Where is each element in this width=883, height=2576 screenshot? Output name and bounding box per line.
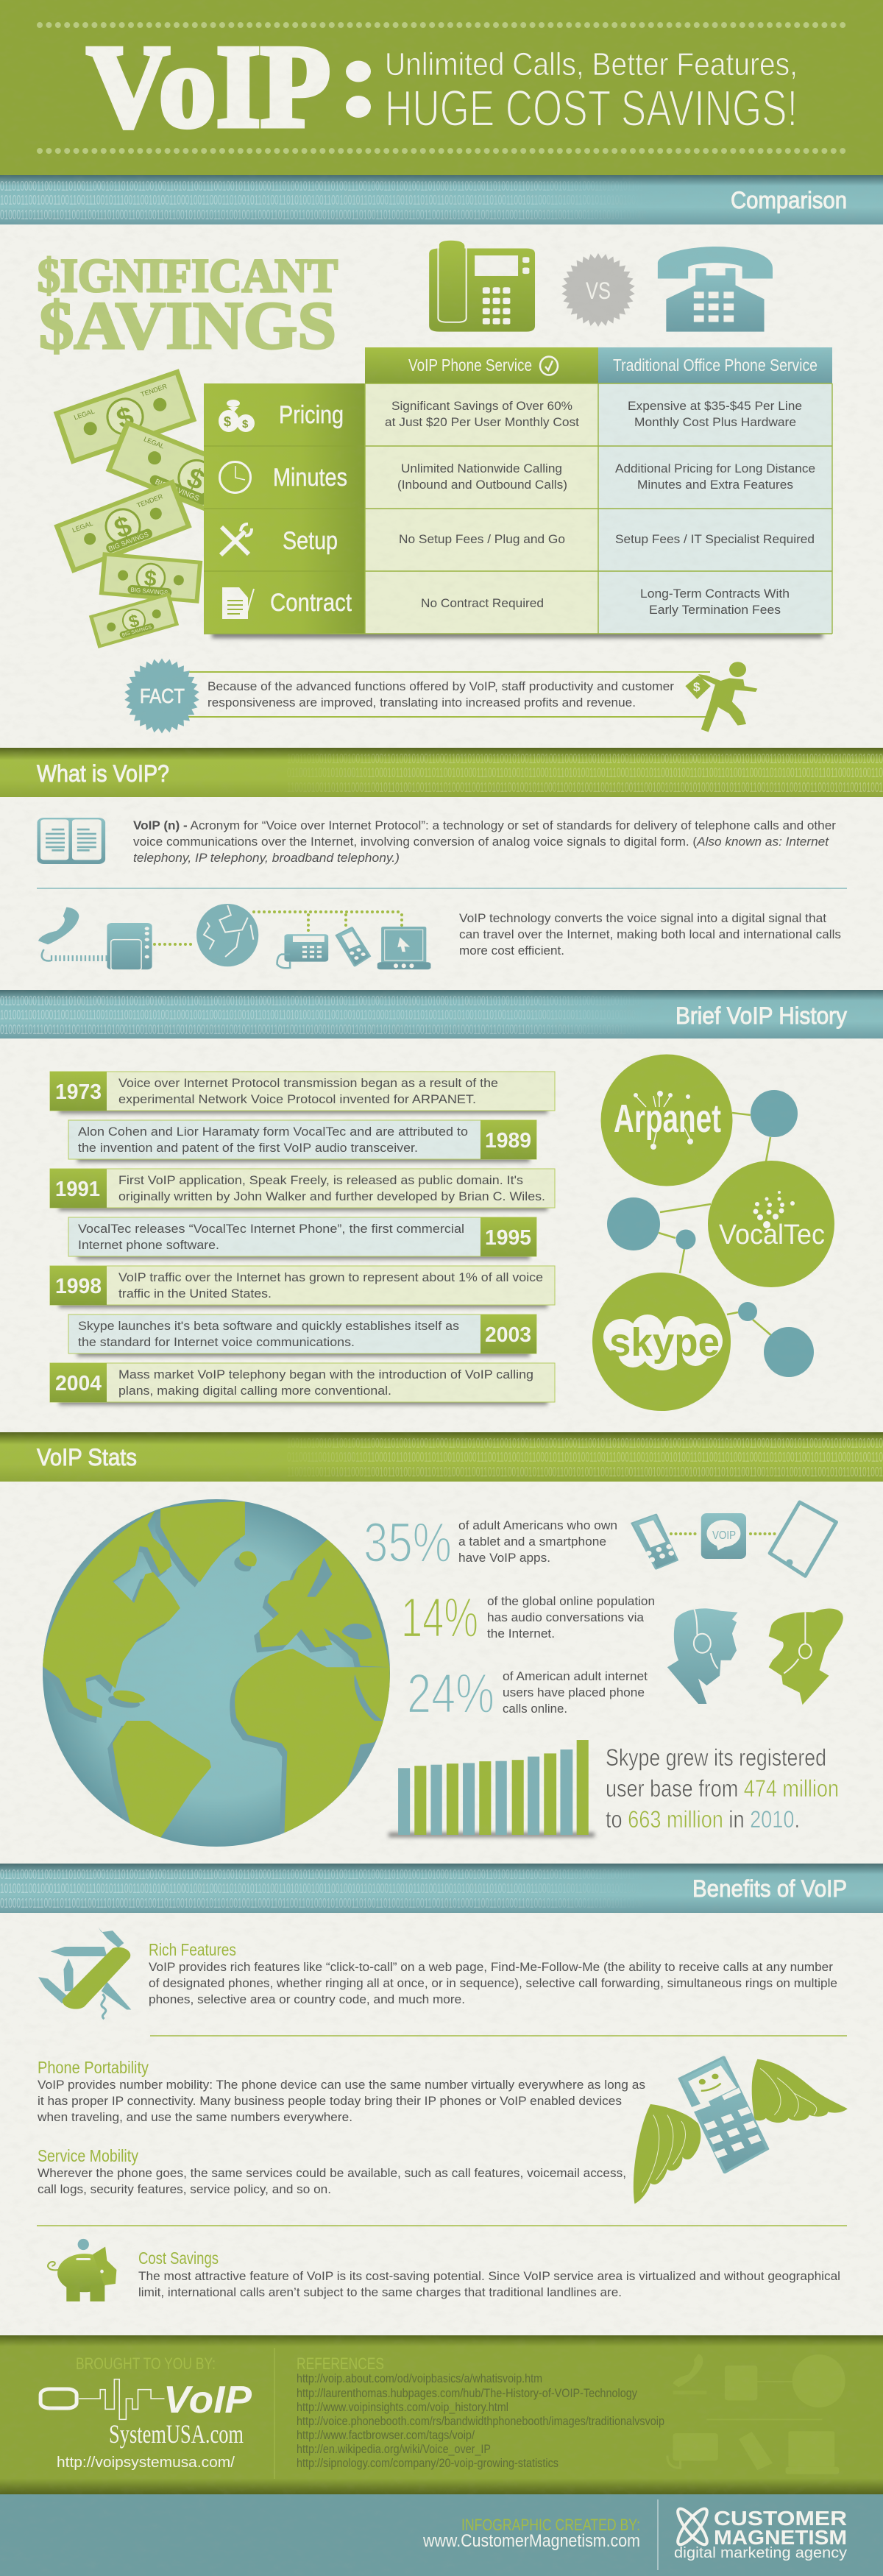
section band: Benefits of VoIP: Benefits of VoIP: [692, 1875, 847, 1902]
VoIP column cells: Unlimited Nationwide Calling: [401, 461, 562, 475]
bubble: VocalTec: VocalTec: [719, 1220, 825, 1250]
icon: laptop: [377, 927, 430, 969]
VoIP column cells: Significant Savings of Over 60%: [391, 399, 572, 413]
section band: What is VoIP?: [0, 748, 883, 797]
header: Traditional Office Phone Service: [598, 347, 832, 383]
VoIP definition text: [133, 818, 836, 865]
illustration: globe: [38, 1499, 390, 1847]
footer: green panel: [0, 2335, 883, 2494]
bubble: Arpanet: [600, 1054, 733, 1186]
VoIP technology text: VoIP technology converts the voice signal into a digital signal that: [459, 911, 826, 925]
Customer Magnetism logo: [673, 2505, 847, 2561]
references: http://www.voipinsights.com/voip_history.html: [297, 2400, 508, 2414]
traditional column cells: Additional Pricing for Long Distance: [615, 461, 815, 475]
2003: [68, 1314, 536, 1356]
benefit: Phone Portability: VoIP provides number mobility: The phone device can use the same number virtually everywhere as long as: [38, 2078, 645, 2092]
benefit: Rich Features: phones, selective area or country code, and much more.: [149, 1992, 465, 2006]
man with headset: [667, 1608, 738, 1704]
stat: Skype growth text: to 663 million in 2010.: [606, 1806, 800, 1833]
label: Setup: Setup: [283, 527, 338, 555]
VoIP column cells: No Contract Required: [421, 596, 544, 610]
stat: Skype growth text: [606, 1744, 839, 1833]
icons: phone, VoIP bubble, tablet: [632, 1502, 836, 1576]
label: Minutes: Minutes: [273, 464, 347, 492]
benefit: Cost Savings: [138, 2248, 840, 2299]
bubble: Skype: skype: [609, 1320, 720, 1365]
references: http://en.wikipedia.org/wiki/Voice_over_IP: [297, 2442, 491, 2456]
2004: Mass market VoIP telephony began with the introduction of VoIP calling: [118, 1367, 533, 1381]
section band: Brief VoIP History: Brief VoIP History: [675, 1002, 847, 1029]
stat: 14%: of the global online population: [487, 1594, 655, 1608]
stat: 35%: have VoIP apps.: [458, 1551, 550, 1565]
icon: running man with briefcase: $: [693, 680, 701, 694]
traditional column cells: Setup Fees / IT Specialist Required: [615, 532, 815, 546]
label: Contract: Contract: [270, 589, 352, 617]
icon: open book: [38, 818, 105, 864]
stat: 24%: of American adult internet: [503, 1669, 648, 1683]
traditional column cells: [598, 383, 832, 634]
1998: 1998: [55, 1275, 102, 1298]
icon: money bags: $: [224, 414, 231, 429]
fact text: [208, 679, 674, 710]
1973: experimental Network Voice Protocol invented for ARPANET.: [118, 1092, 476, 1106]
benefit: Cost Savings: Cost Savings: [138, 2248, 219, 2268]
traditional column cells: Monthly Cost Plus Hardware: [634, 415, 796, 429]
Customer Magnetism logo: digital marketing agency: [674, 2545, 847, 2561]
section band: What is VoIP?: What is VoIP?: [37, 760, 169, 787]
icon: traditional phone: [658, 247, 773, 332]
benefit: Rich Features: [149, 1940, 837, 2006]
section band: Comparison: [0, 175, 883, 224]
2003: the standard for Internet voice communications.: [78, 1335, 355, 1349]
bill 1: $: [113, 401, 138, 435]
bill 1: TENDER: [140, 382, 169, 398]
VoIP column cells: No Setup Fees / Plug and Go: [399, 532, 565, 546]
stat: 35%: 35%: [364, 1512, 452, 1574]
references: http://www.factbrowser.com/tags/voip/: [297, 2428, 475, 2442]
header: Traditional Office Phone Service: Traditional Office Phone Service: [613, 355, 818, 375]
bill 2: $: [182, 462, 208, 497]
footer: teal panel: [0, 2494, 883, 2576]
icon: handset: [38, 907, 107, 960]
2004: 2004: [55, 1372, 102, 1395]
infographic credit: [422, 2516, 640, 2551]
sponsor logo: VoIP: [163, 2379, 252, 2421]
sponsor logo: [40, 2379, 252, 2449]
title colon: [346, 60, 371, 118]
bubble: Skype: [592, 1273, 731, 1411]
1973: Voice over Internet Protocol transmission began as a result of the: [118, 1076, 498, 1090]
bill 2: LEGAL: [143, 435, 166, 450]
1989: [68, 1120, 536, 1162]
woman with headset: [769, 1608, 843, 1705]
icon: money bags: [219, 400, 255, 432]
header: VoIP Phone Service: VoIP Phone Service: [408, 355, 532, 375]
icon: clock: [219, 462, 250, 493]
stat: 14%: 14%: [401, 1587, 478, 1649]
heading: Significant Savings: $AVINGS: [39, 288, 336, 363]
1998: [50, 1266, 555, 1308]
stat: 24%: calls online.: [503, 1702, 567, 1716]
stat: Skype growth text: Skype grew its registered: [606, 1744, 826, 1771]
brought to you by: BROUGHT TO YOU BY:: [76, 2354, 216, 2373]
bill 5: BIG SAVINGS: [121, 625, 153, 638]
stat: 35%: of adult Americans who own: [458, 1518, 617, 1532]
1973: 1973: [55, 1080, 102, 1104]
1995: [68, 1217, 536, 1259]
infographic credit: INFOGRAPHIC CREATED BY:: [461, 2516, 640, 2534]
icon: mobile phone: [336, 927, 370, 966]
1995: VocalTec releases “VocalTec Internet Phone”, the first commercial: [78, 1222, 464, 1236]
Customer Magnetism logo: CUSTOMER: [714, 2507, 847, 2530]
stat: 35%: a tablet and a smartphone: [458, 1535, 606, 1549]
sponsor url: http://voipsystemusa.com/: [57, 2455, 235, 2471]
VoIP column cells: [365, 383, 598, 634]
1973: [50, 1072, 555, 1114]
1991: [50, 1169, 555, 1211]
section band: Brief VoIP History: [0, 990, 883, 1038]
heading: Significant Savings: [38, 250, 338, 363]
benefit: Service Mobility: Wherever the phone goes, the same services could be available, such as call features, voicemail access,: [38, 2166, 626, 2180]
comparison table: [204, 347, 832, 638]
bill 3: $: [110, 511, 136, 545]
icon: contract document: [222, 587, 254, 619]
1998: VoIP traffic over the Internet has grown to represent about 1% of all voice: [118, 1270, 543, 1284]
1989: Alon Cohen and Lior Haramaty form VocalTec and are attributed to: [78, 1125, 468, 1139]
benefit: Phone Portability: it has proper IP connectivity. Many business people today bring their IP phones or VoIP enabled devices: [38, 2094, 622, 2108]
traditional column cells: Expensive at $35-$45 Per Line: [628, 399, 802, 413]
bill 1: LEGAL: [73, 407, 96, 421]
stat: Skype growth text: user base from 474 million: [606, 1775, 839, 1802]
header banner: [0, 0, 883, 175]
icon: VoIP adapter: [107, 923, 152, 970]
bar chart: Skype user growth: [389, 1740, 595, 1837]
traditional column cells: Minutes and Extra Features: [637, 478, 793, 492]
stat: 35%: [364, 1512, 617, 1574]
icons: headset agents: [667, 1608, 843, 1705]
benefit: Phone Portability: when traveling, and use the same numbers everywhere.: [37, 2110, 352, 2124]
references: [297, 2354, 664, 2470]
references: http://laurenthomas.hubpages.com/hub/The-History-of-VOIP-Technology: [297, 2386, 637, 2400]
fact text: responsiveness are improved, translating into increased profits and revenue.: [208, 696, 636, 710]
benefit: Phone Portability: [37, 2058, 645, 2124]
1995: Internet phone software.: [78, 1238, 219, 1252]
bill 4: $: [143, 566, 157, 592]
bubble: Arpanet: Arpanet: [614, 1097, 721, 1141]
bill 5: [89, 592, 179, 648]
badge: VS: VS: [586, 277, 611, 304]
benefit: Rich Features: VoIP provides rich features like “click-to-call” on a web page, Find-Me-Follow-Me (the ability to receive calls at any number: [149, 1960, 833, 1974]
faded network diagram: [667, 2354, 845, 2474]
row labels column: [204, 383, 365, 634]
VoIP technology text: more cost efficient.: [459, 944, 564, 958]
bill 5: $: [127, 611, 142, 632]
bubble: VocalTec: [708, 1161, 834, 1287]
icon: globe: [196, 904, 258, 966]
bill 3: LEGAL: [71, 520, 93, 534]
infographic credit: www.CustomerMagnetism.com: [422, 2531, 640, 2551]
title: VoIP: VoIP: [87, 21, 330, 152]
icon: swiss army knife: [38, 1928, 131, 2019]
benefit: Phone Portability: Phone Portability: [38, 2058, 149, 2077]
subtitle line 1: Unlimited Calls, Better Features,: [385, 46, 798, 82]
icon: money bags: $: [242, 418, 249, 431]
section band: Benefits of VoIP: [0, 1864, 883, 1913]
traditional column cells: Long-Term Contracts With: [640, 587, 790, 601]
1995: 1995: [485, 1226, 531, 1250]
bill 3: [54, 479, 192, 573]
references: REFERENCES: [297, 2354, 384, 2373]
1991: 1991: [55, 1178, 100, 1201]
traditional column cells: Early Termination Fees: [649, 603, 781, 617]
bill 2: [106, 420, 249, 520]
benefit: Cost Savings: The most attractive feature of VoIP is its cost-saving potential. Since VoIP service area is virtualized and without geographical: [138, 2269, 840, 2283]
badge: VS: [561, 253, 635, 327]
stat: 24%: 24%: [407, 1663, 494, 1725]
benefit: Rich Features: Rich Features: [149, 1940, 236, 1959]
label: Pricing: Pricing: [279, 401, 344, 429]
dotted connection lines: [155, 912, 403, 944]
2003: Skype launches it's beta software and quickly establishes itself as: [78, 1319, 459, 1333]
bill 2: BIG SAVINGS: [154, 478, 200, 503]
icons: phone, VoIP bubble, tablet: VOIP: [712, 1529, 736, 1542]
icon: piggy bank: [48, 2239, 116, 2301]
VoIP technology text: can travel over the Internet, making both local and international calls: [459, 927, 841, 941]
fact badge: [124, 658, 199, 734]
icon: VoIP desk phone: [429, 241, 535, 332]
benefit: Service Mobility: Service Mobility: [38, 2146, 138, 2165]
2004: plans, making digital calling more conventional.: [118, 1384, 391, 1398]
section band: VoIP Stats: [0, 1432, 883, 1482]
section band: Comparison: Comparison: [731, 187, 847, 213]
benefit: Rich Features: of designated phones, whether ringing all at once, or in sequence), selective call forwarding, simultaneous rings on multiple: [149, 1976, 837, 1990]
stat: 24%: [407, 1663, 648, 1725]
stat: 24%: users have placed phone: [503, 1685, 645, 1699]
stat: 14%: [401, 1587, 655, 1649]
bill 4: [99, 552, 202, 604]
bill 4: BIG SAVINGS: [130, 587, 169, 596]
VoIP column cells: (Inbound and Outbound Calls): [397, 478, 567, 492]
icon: winged phone: [634, 2057, 848, 2204]
icon: tools: [221, 524, 252, 555]
VoIP column cells: at Just $20 Per User Monthly Cost: [385, 415, 579, 429]
references: http://voip.about.com/od/voipbasics/a/whatisvoip.htm: [297, 2371, 542, 2385]
illustration: dollar bills: [54, 369, 249, 648]
icon: running man with briefcase: [685, 662, 757, 732]
2004: [50, 1363, 555, 1405]
benefit: Cost Savings: limit, international calls aren’t subject to the same charges that traditional landlines are.: [138, 2285, 622, 2299]
header: VoIP Phone Service: [365, 347, 598, 383]
bubble network: Arpanet, VocalTec, Skype: [592, 1054, 834, 1411]
1989: the invention and patent of the first VoIP audio transceiver.: [78, 1141, 418, 1155]
bill 3: TENDER: [136, 492, 164, 509]
stat: 14%: has audio conversations via: [487, 1610, 645, 1624]
1991: originally written by John Walker and further developed by Brian C. Wiles.: [118, 1189, 545, 1203]
1989: 1989: [485, 1129, 531, 1153]
VoIP definition text: telephony, IP telephony, broadband telephony.): [133, 851, 400, 865]
callout: fact: [124, 658, 757, 734]
timeline: VoIP history: [50, 1072, 555, 1405]
1998: traffic in the United States.: [118, 1287, 272, 1301]
VoIP definition text: voice communications over the Internet, involving conversion of analog voice signals to digital form. ( Also known as: Internet: [133, 835, 829, 849]
stat: 14%: the Internet.: [487, 1627, 555, 1641]
fact badge: FACT: [140, 684, 185, 707]
bill 3: BIG SAVINGS: [107, 531, 149, 553]
2003: 2003: [485, 1323, 531, 1347]
references: http://voice.phonebooth.com/rs/bandwidthphonebooth/images/traditionalvsvoip: [297, 2414, 664, 2428]
Customer Magnetism logo: MAGNETISM: [714, 2526, 847, 2549]
VoIP technology text: [459, 911, 841, 958]
references: http://sipnology.com/company/20-voip-growing-statistics: [297, 2456, 558, 2470]
bill 1: [54, 369, 196, 464]
VoIP definition text: VoIP (n) - Acronym for “Voice over Internet Protocol”: a technology or set of standards for delivery of telephone calls and other: [133, 818, 836, 832]
section band: VoIP Stats: VoIP Stats: [37, 1444, 137, 1471]
benefit: Service Mobility: call logs, security features, service policy, and so on.: [38, 2182, 331, 2196]
1991: First VoIP application, Speak Freely, is released as public domain. It's: [118, 1173, 523, 1187]
fact text: Because of the advanced functions offered by VoIP, staff productivity and customer: [208, 679, 674, 693]
benefit: Service Mobility: [38, 2146, 626, 2196]
heading: Significant Savings: $IGNIFICANT: [38, 250, 338, 302]
diagram: how VoIP connects: [38, 904, 430, 970]
icon: desk phone: [277, 934, 328, 968]
sponsor logo: SystemUSA.com: [109, 2419, 244, 2449]
